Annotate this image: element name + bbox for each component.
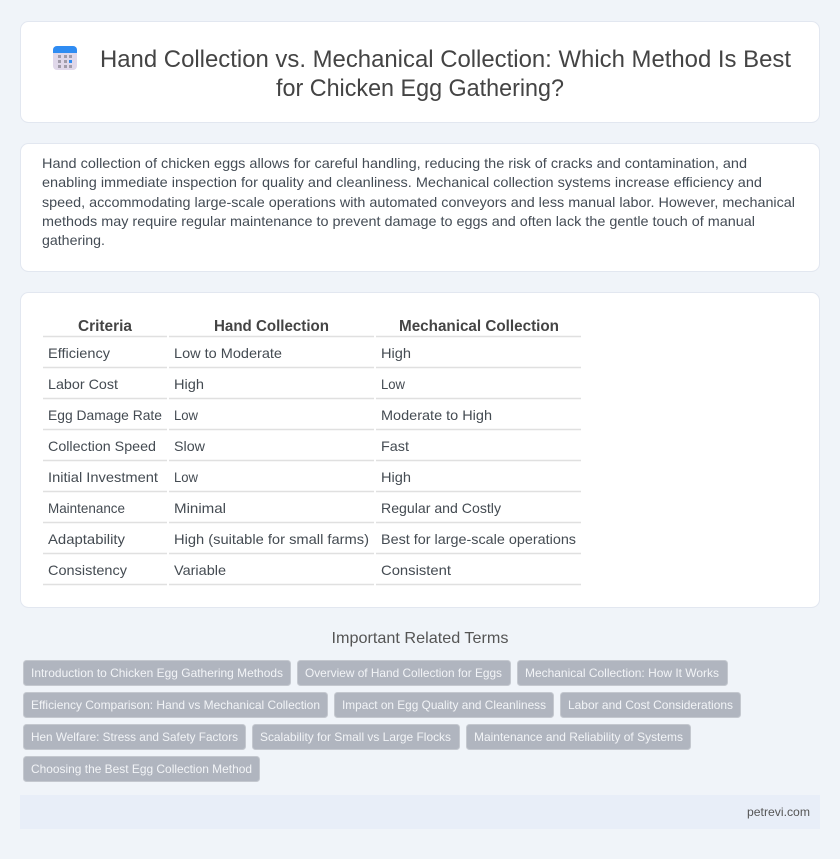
row: consistency: Variable [174, 562, 226, 578]
table header: Mechanical Collection [399, 318, 559, 335]
row: egg damage rate: Low [174, 407, 199, 423]
row: labor cost: Labor Cost [48, 376, 118, 392]
footer [20, 795, 820, 829]
tag: Overview of Hand Collection for Eggs [305, 666, 502, 680]
row: consistency [48, 562, 451, 578]
row: egg damage rate: Egg Damage Rate [48, 407, 162, 423]
row: collection speed: Collection Speed [48, 438, 156, 454]
row: collection speed: Slow [174, 438, 206, 454]
row: efficiency: Low to Moderate [174, 345, 282, 361]
row: maintenance [48, 500, 501, 516]
row: collection speed: Fast [381, 438, 409, 454]
row: adaptability: High (suitable for small farms) [174, 531, 369, 547]
panel: introduction text: Hand collection of chicken eggs allows for careful handling, reducing the risk of cracks and contamination, and [42, 155, 747, 171]
panel: introduction text: gathering. [42, 232, 105, 248]
tag: Maintenance and Reliability of Systems [474, 730, 683, 744]
row: adaptability [48, 531, 576, 547]
panel: title card [20, 22, 820, 122]
tag [334, 692, 554, 718]
tag: Choosing the Best Egg Collection Method [31, 762, 252, 776]
table header: Hand Collection [214, 318, 329, 335]
panel: introduction text: enabling immediate inspection for quality and cleanliness. Mechanical collection systems increase efficiency and [42, 174, 762, 190]
panel: introduction text: methods may require regular maintenance to prevent damage to eggs and often lack the gentle touch of manual [42, 213, 755, 229]
row: egg damage rate: Moderate to High [381, 407, 492, 423]
row: efficiency: High [381, 345, 411, 361]
panel: introduction text: speed, accommodating large-scale operations with automated conveyors and less manual labor. However, mechanical [42, 194, 795, 210]
tag: Mechanical Collection: How It Works [525, 666, 719, 680]
heading: related terms: Important Related Terms [332, 630, 508, 647]
title [100, 46, 791, 102]
row: maintenance: Maintenance [48, 500, 125, 516]
tag: Scalability for Small vs Large Flocks [260, 730, 451, 744]
row: labor cost: High [174, 376, 204, 392]
row: labor cost [48, 376, 406, 392]
title: Hand Collection vs. Mechanical Collection: Which Method Is Best [100, 46, 791, 73]
tag: Hen Welfare: Stress and Safety Factors [31, 730, 238, 744]
tag: Introduction to Chicken Egg Gathering Methods [31, 666, 283, 680]
tag [252, 724, 460, 750]
tag [24, 756, 260, 782]
footer: petrevi.com [747, 805, 810, 819]
tag: Impact on Egg Quality and Cleanliness [342, 698, 546, 712]
row: initial investment [48, 469, 411, 485]
row: efficiency: Efficiency [48, 345, 110, 361]
table header [78, 318, 559, 335]
row: initial investment: Initial Investment [48, 469, 158, 485]
tag [466, 724, 690, 750]
title: for Chicken Egg Gathering? [276, 75, 564, 102]
row: initial investment: High [381, 469, 411, 485]
tag: Efficiency Comparison: Hand vs Mechanical Collection [31, 698, 320, 712]
tag [24, 692, 328, 718]
row: consistency: Consistency [48, 562, 127, 578]
tag [24, 724, 246, 750]
panel: comparison table [20, 292, 820, 608]
tag [298, 660, 510, 686]
panel: related term tags [24, 660, 740, 782]
row: initial investment: Low [174, 469, 199, 485]
row: labor cost: Low [381, 376, 406, 392]
row: efficiency [48, 345, 411, 361]
icon: calendar [53, 46, 77, 70]
row: adaptability: Adaptability [48, 531, 125, 547]
tag [518, 660, 728, 686]
row: maintenance: Minimal [174, 500, 226, 516]
row: egg damage rate [48, 407, 492, 423]
tag: Labor and Cost Considerations [568, 698, 733, 712]
table header: Criteria [78, 318, 132, 335]
panel: introduction text [20, 144, 820, 272]
tag [24, 660, 290, 686]
row: collection speed [48, 438, 409, 454]
row: adaptability: Best for large-scale operations [381, 531, 576, 547]
row: consistency: Consistent [381, 562, 451, 578]
tag [560, 692, 740, 718]
row: maintenance: Regular and Costly [381, 500, 501, 516]
